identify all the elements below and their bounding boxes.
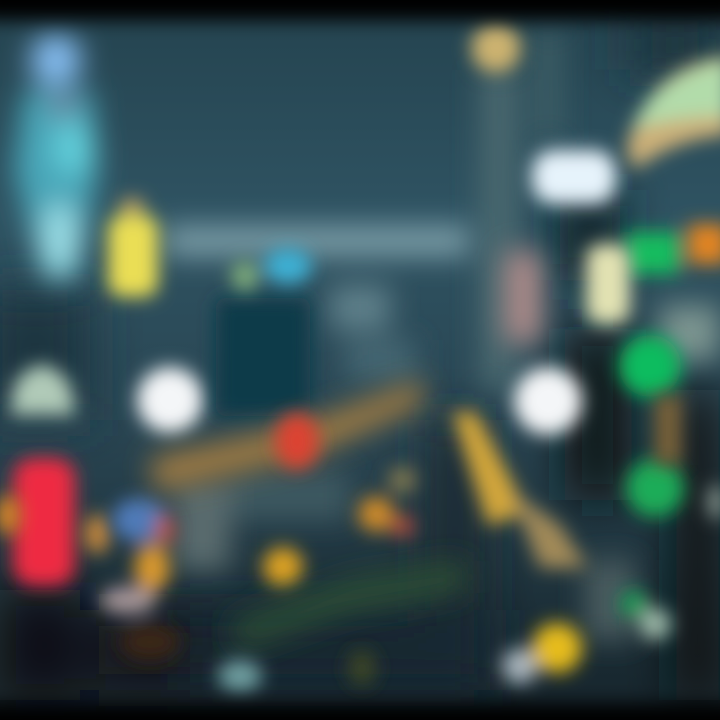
- vertical pale column: [480, 30, 561, 390]
- green ground band: [230, 560, 465, 650]
- orange and red cluster: [358, 466, 416, 538]
- dark teal block: [216, 298, 310, 416]
- pink grey capsule: [504, 250, 542, 344]
- small teal mark: [218, 650, 376, 692]
- cyan and lime marks: [231, 248, 312, 291]
- brown vertical bar: [655, 395, 681, 465]
- red capsule: [13, 458, 75, 586]
- white circle right: [514, 367, 582, 435]
- yellow diagonal wedge: [452, 412, 588, 568]
- umbrella dome top right: [626, 56, 720, 170]
- red-orange marker: [275, 413, 319, 469]
- white cloud: [532, 150, 616, 204]
- yellow-orange dot: [263, 547, 303, 587]
- diagonal orange road: [150, 380, 425, 492]
- tan circle top: [471, 23, 521, 73]
- tall light blue shape: [14, 34, 98, 280]
- blue and orange icon: [100, 498, 180, 660]
- green and orange tabs: [626, 224, 720, 274]
- green circles column: [619, 335, 720, 640]
- pale yellow capsule: [586, 244, 630, 324]
- yellow capsule: [108, 198, 158, 297]
- pale dome left: [10, 365, 76, 415]
- horizontal pale band: [165, 226, 720, 640]
- white circle left: [137, 367, 203, 433]
- yellow dot bottom: [502, 623, 582, 684]
- orange side marks: [0, 495, 110, 554]
